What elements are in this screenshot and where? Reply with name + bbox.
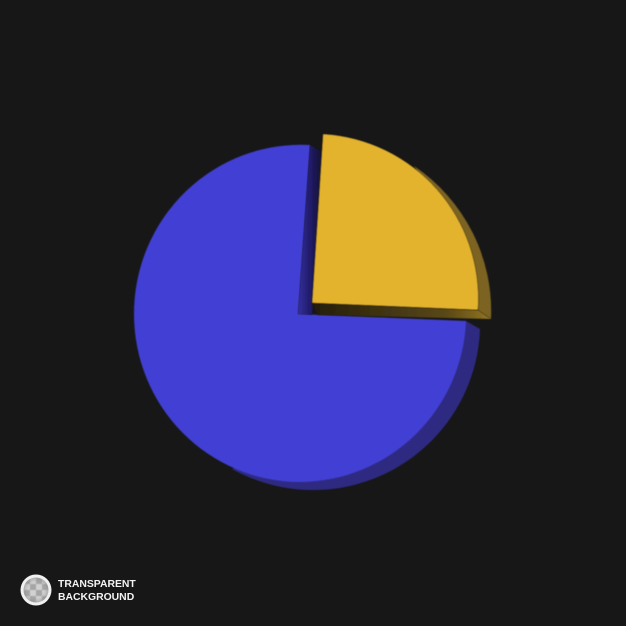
yellow slice face xyxy=(312,134,478,310)
badge: transparent background xyxy=(20,574,136,606)
label: BACKGROUND xyxy=(58,592,135,603)
blue slice face xyxy=(134,145,466,482)
yellow slice side wall xyxy=(414,166,491,319)
pie chart xyxy=(134,134,491,490)
label xyxy=(58,579,136,603)
label: TRANSPARENT xyxy=(58,579,136,590)
yellow slice lower wall xyxy=(312,303,491,319)
blue slice notch wall xyxy=(298,145,322,315)
blue slice side wall xyxy=(232,321,480,490)
icon: checker circle xyxy=(20,574,52,606)
